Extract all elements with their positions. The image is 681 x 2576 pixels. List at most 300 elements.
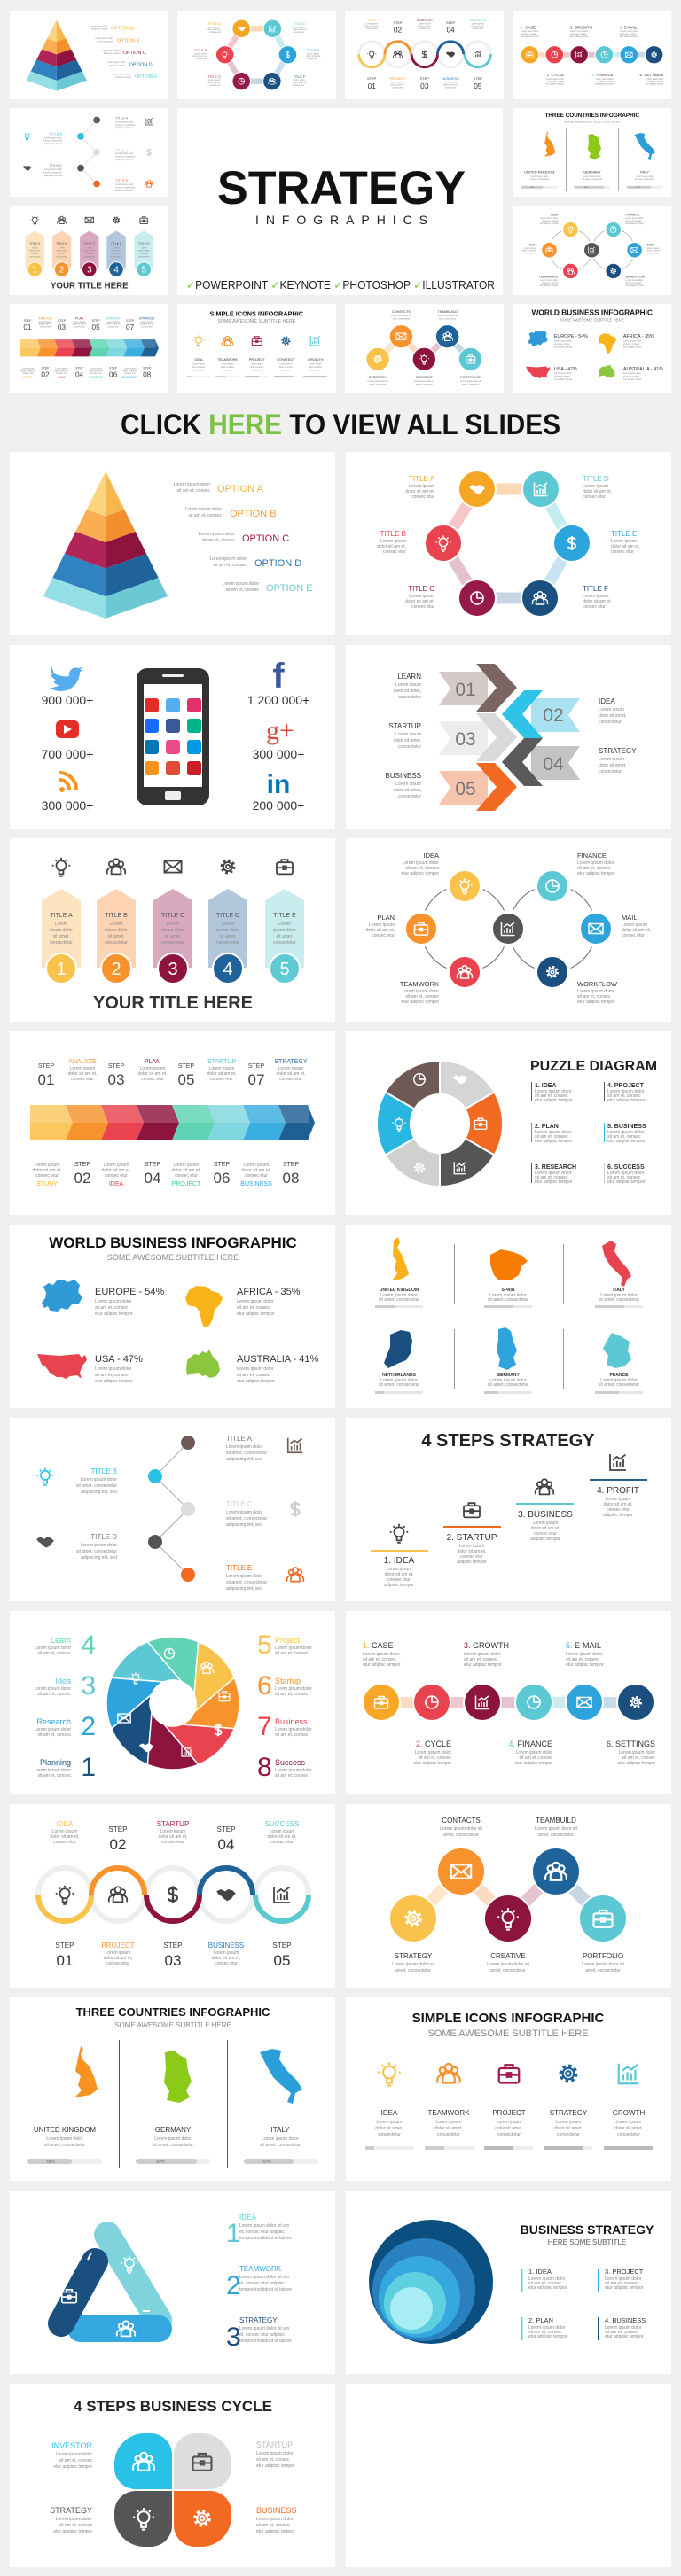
step labels: Lorem ipsum — [387, 1567, 411, 1572]
panel: six countries — [346, 1225, 671, 1408]
column texts: TITLE E — [273, 913, 296, 919]
wave labels: BUSINESS — [208, 1942, 244, 1950]
triangle list: tempor incididunt ut labore — [239, 2287, 292, 2292]
ring labels: dolor sit am et, — [405, 599, 434, 604]
panel: world business infographic — [10, 1225, 335, 1408]
right labels: 6 — [257, 1671, 272, 1700]
bottom step labels: IDEA — [109, 1181, 123, 1187]
panel: hexagon ring — [346, 452, 671, 635]
loop labels: consec etur — [372, 933, 395, 938]
column texts: sit amet, — [165, 934, 181, 939]
stat: google plus: 300 000+ — [253, 747, 304, 761]
panel: wave steps — [10, 1804, 335, 1988]
country labels: Lorem ipsum dolor — [380, 1378, 418, 1383]
right labels: Lorem ipsum dolor — [275, 1646, 312, 1651]
chevron labels: LEARN — [397, 673, 421, 681]
triangle list: et, consec etur adipisic — [239, 2230, 285, 2235]
triangle list: tempor incididunt ut labore — [239, 2339, 292, 2344]
process labels: etur adipisc tempor — [464, 1662, 502, 1668]
wave labels: 03 — [165, 1952, 181, 1969]
step labels: Lorem ipsum — [533, 1521, 558, 1526]
country labels: sit amet, consectetur — [44, 2143, 85, 2148]
loop labels: consec etur — [622, 933, 645, 938]
wave labels: STEP — [109, 1825, 127, 1833]
right labels: 8 — [257, 1753, 272, 1782]
right labels: Lorem ipsum dolor — [275, 1727, 312, 1732]
chevron 01 — [439, 664, 517, 712]
panel: chevron steps — [346, 645, 671, 829]
network labels: TEAMBUILD — [536, 1817, 576, 1825]
process labels: etur adipisc tempor — [413, 1761, 451, 1766]
right labels: 5 — [257, 1630, 272, 1660]
icon labels: PROJECT — [492, 2109, 526, 2117]
top step labels: consec etur — [71, 1077, 94, 1082]
ring labels: consec etur — [411, 494, 434, 500]
tree labels: sit amet, consectetur — [226, 1516, 267, 1521]
left labels: Lorem ipsum dolor — [35, 1646, 71, 1651]
wave labels: Lorem ipsum — [106, 1950, 130, 1956]
process labels: 4. FINANCE — [508, 1739, 552, 1748]
icon labels: dolor sit amet, — [554, 2126, 583, 2131]
icon labels: Lorem ipsum — [556, 2120, 581, 2125]
options list: OPTION A — [217, 484, 264, 494]
ring labels: consec etur — [411, 604, 434, 610]
left labels: Planning — [40, 1758, 71, 1767]
column texts: TITLE D — [216, 913, 239, 919]
wave labels: STEP — [273, 1942, 291, 1950]
column texts: sit amet, — [108, 934, 124, 939]
wave labels: SUCCESS — [265, 1820, 299, 1828]
column texts: Lorem — [167, 922, 179, 927]
strategy items: 3. PROJECT — [605, 2268, 644, 2276]
europe text: EUROPE - 54% — [95, 1287, 164, 1297]
puzzle items: Lorem ipsum dolor — [535, 1130, 572, 1135]
country labels: Lorem ipsum dolor — [380, 1293, 418, 1298]
puzzle items: sit am et, consec — [607, 1175, 641, 1180]
process labels: 3. GROWTH — [464, 1641, 509, 1650]
left labels: 4 — [81, 1630, 96, 1660]
cycle labels: sit am et, consec — [59, 2523, 92, 2528]
top step labels: dolor sit am et, — [277, 1071, 305, 1077]
panel: social media — [10, 645, 335, 829]
loop labels: sit am et, consec — [405, 866, 439, 871]
top step labels: STARTUP — [207, 1059, 236, 1065]
step labels: dolor sit am et, — [531, 1526, 560, 1531]
options list: OPTION E — [266, 583, 313, 594]
process labels: Lorem ipsum dolor — [464, 1652, 501, 1657]
puzzle items: etur adipisc tempor — [535, 1139, 573, 1144]
puzzle items: sit am et, consec — [607, 1134, 641, 1140]
bottom step labels: STEP — [145, 1162, 160, 1168]
australia text: sit am et, consec — [237, 1373, 270, 1378]
options list: OPTION D — [254, 558, 301, 569]
top step labels: consec etur — [141, 1077, 164, 1082]
cycle labels — [50, 2440, 297, 2534]
step lines — [371, 1479, 647, 1552]
bottom step labels: 08 — [283, 1170, 299, 1187]
strategy items — [521, 2268, 646, 2340]
bottom step labels: dolor sit am et, — [172, 1168, 200, 1173]
chevron labels: Lorem ipsum — [395, 682, 421, 688]
panel: your title here columns — [10, 838, 335, 1022]
strategy items: etur adipisic tempor — [528, 2285, 568, 2291]
step labels: dolor sit am et, — [604, 1502, 632, 1507]
tree connectors — [155, 1443, 188, 1575]
triangle list: STRATEGY — [239, 2316, 278, 2324]
map: uk — [392, 1237, 409, 1280]
column texts: TITLE A — [50, 913, 73, 919]
bottom step labels: PROJECT — [172, 1181, 201, 1187]
bottom step labels: BUSINESS — [240, 1181, 272, 1187]
map: germany — [497, 1327, 517, 1370]
options list: OPTION C — [242, 533, 289, 544]
column tabs — [42, 889, 304, 968]
cycle labels: Lorem ipsum dolor — [256, 2451, 294, 2456]
network labels: amet, consectetur — [395, 1968, 431, 1973]
left labels: Lorem ipsum dolor — [35, 1686, 71, 1692]
chevron 05 — [439, 763, 517, 811]
wave labels: dolor sit am et, — [159, 1834, 187, 1840]
left labels: sit am et, consec — [37, 1773, 71, 1778]
country labels: Lorem ipsum dolor — [489, 1293, 527, 1298]
loop labels: Lorem ipsum dolor — [577, 989, 614, 994]
wave labels: Lorem ipsum — [270, 1829, 294, 1834]
top step labels: dolor sit am et, — [138, 1071, 167, 1077]
step labels: 3. BUSINESS — [518, 1510, 573, 1520]
tree labels: adipiscing elit, sed — [226, 1522, 262, 1528]
map: france — [603, 1333, 631, 1368]
progress bars: 82% — [156, 2159, 165, 2164]
cycle labels: etur adipisic tempor — [53, 2464, 92, 2470]
hero: strategy infographics — [177, 108, 503, 295]
ring labels: Lorem ipsum — [611, 539, 637, 544]
top step labels: STEP — [38, 1063, 54, 1070]
tree labels: Lorem ipsum dolor — [226, 1574, 263, 1579]
panel: 4 steps strategy — [346, 1418, 671, 1601]
map: europe — [42, 1280, 82, 1312]
strategy items: sit am et, consec — [528, 2281, 562, 2286]
loop labels: etur adipisc tempor — [577, 1000, 615, 1005]
stat: rss: 300 000+ — [42, 798, 93, 813]
panel: puzzle diagram — [346, 1031, 671, 1215]
strategy items: 2. PLAN — [528, 2316, 553, 2324]
chevron labels: Lorem ipsum — [395, 732, 421, 737]
column texts: consectetur — [273, 940, 296, 946]
cycle labels: INVESTOR — [51, 2441, 93, 2450]
progress bars: 59% — [46, 2159, 55, 2164]
panel: six circles process — [346, 1611, 671, 1794]
progress bars — [27, 2159, 318, 2164]
bottom step labels: STEP — [74, 1162, 90, 1168]
phone with app grid — [137, 668, 209, 805]
tree labels: TITLE A — [226, 1435, 253, 1443]
triangle list: TEAMWORK — [239, 2265, 282, 2273]
wave labels: dolor sit am et, — [268, 1834, 296, 1840]
wave labels: 01 — [57, 1952, 73, 1969]
column texts: ipsum dolor — [273, 928, 296, 933]
heading: WORLD BUSINESS INFOGRAPHIC — [49, 1234, 297, 1251]
process labels: Lorem ipsum dolor — [363, 1652, 400, 1657]
chevron 04 — [502, 738, 580, 786]
africa text: sit am et, consec — [237, 1305, 270, 1311]
tree labels: Lorem ipsum dolor — [226, 1444, 263, 1450]
tree nodes — [148, 1436, 195, 1582]
right labels: Lorem ipsum dolor — [275, 1686, 312, 1692]
chevron 02 — [502, 690, 580, 738]
column texts: consectetur — [105, 940, 128, 946]
left labels: Lorem ipsum dolor — [35, 1768, 71, 1773]
strategy items: sit am et, consec — [528, 2330, 562, 2335]
icon row — [378, 2062, 638, 2086]
top step labels: Lorem ipsum — [140, 1066, 165, 1071]
strategy items: Lorem ipsum dolor — [528, 2276, 566, 2282]
subtitle: SOME AWESOME SUBTITLE HERE — [114, 2021, 231, 2029]
heading: THREE COUNTRIES INFOGRAPHIC — [76, 2005, 270, 2019]
icon: linkedin: in — [267, 770, 290, 799]
top step labels: 07 — [248, 1071, 264, 1088]
wave labels: IDEA — [57, 1820, 74, 1828]
ring nodes — [425, 471, 591, 617]
icon: google plus: g+ — [266, 716, 294, 745]
tree labels — [76, 1435, 267, 1592]
step labels: dolor sit am et, — [385, 1572, 413, 1577]
network labels: Lorem ipsum dolor sit — [487, 1962, 530, 1967]
bottom step labels: STEP — [214, 1162, 230, 1168]
right labels: sit am et, consec — [275, 1651, 309, 1656]
strategy items: Lorem ipsum dolor — [605, 2276, 642, 2282]
left labels: sit am et, consec — [37, 1692, 71, 1697]
map: italy — [260, 2049, 302, 2104]
wave rings — [38, 1868, 309, 1921]
process labels: Lorem ipsum dolor — [516, 1750, 552, 1755]
step labels: consec etur — [534, 1531, 557, 1537]
icon labels: dolor sit amet, — [375, 2126, 403, 2131]
options list — [174, 482, 313, 594]
nested circles — [369, 2220, 493, 2344]
icon: facebook: f — [272, 657, 285, 696]
ring labels: Lorem ipsum — [380, 539, 406, 544]
country labels: sit amet, consectetur — [599, 1382, 639, 1388]
country labels — [34, 2126, 301, 2148]
column texts: consectetur — [216, 940, 239, 946]
process labels: sit am et, consec — [566, 1657, 599, 1662]
right labels: sit am et, consec — [275, 1692, 309, 1697]
left labels: sit am et, consec — [37, 1732, 71, 1738]
network labels: Lorem ipsum dolor sit — [440, 1826, 483, 1832]
stat: facebook: 1 200 000+ — [247, 693, 309, 707]
triangle list: et, consec etur adipisic — [239, 2332, 285, 2338]
triangle list: 2 — [226, 2271, 241, 2300]
usa text: Lorem ipsum dolor — [95, 1366, 132, 1372]
map: italy — [602, 1241, 631, 1287]
step labels: adipisic tempor — [530, 1537, 560, 1542]
column texts: ipsum dolor — [161, 928, 184, 933]
heading: BUSINESS STRATEGY — [521, 2222, 654, 2237]
bottom step labels: 04 — [145, 1170, 160, 1187]
puzzle items: Lorem ipsum dolor — [607, 1171, 645, 1176]
map: australia — [186, 1350, 220, 1378]
loop labels: PLAN — [377, 914, 395, 922]
right labels: sit am et, consec — [275, 1773, 309, 1778]
country labels: ITALY — [613, 1288, 625, 1293]
puzzle items: sit am et, consec — [607, 1093, 641, 1099]
wave labels: dolor sit am et, — [212, 1956, 240, 1961]
network labels: Lorem ipsum dolor sit — [392, 1962, 435, 1967]
panel: timeline tree — [10, 1418, 335, 1601]
process labels: etur adipisc tempor — [566, 1662, 604, 1668]
triangle list: et, consec etur adipisic — [239, 2281, 285, 2286]
panel: contacts network — [346, 1804, 671, 1988]
left labels: sit am et, consec — [37, 1651, 71, 1656]
icon labels: Lorem ipsum — [616, 2120, 641, 2125]
loop labels: Lorem ipsum dolor — [403, 989, 439, 994]
step labels: Lorem ipsum — [606, 1497, 630, 1502]
options list: sit am et, consec — [225, 588, 259, 593]
software list: ✓POWERPOINT ✓KEYNOTE ✓PHOTOSHOP ✓ILLUSTRATOR — [186, 279, 495, 292]
usa text — [95, 1354, 143, 1384]
process labels: etur adipisc tempor — [514, 1761, 552, 1766]
process labels: 1. CASE — [363, 1641, 394, 1650]
europe text: sit am et, consec — [95, 1305, 129, 1311]
top step labels: STRATEGY — [274, 1059, 308, 1065]
cycle labels: Lorem ipsum dolor — [256, 2517, 294, 2522]
column texts: TITLE B — [105, 913, 128, 919]
top step labels: 01 — [38, 1071, 54, 1088]
bottom step labels: STUDY — [36, 1181, 58, 1187]
panel: your title here columns: 3 — [168, 960, 178, 979]
loop labels: Lorem ipsum — [369, 922, 395, 928]
network labels: CONTACTS — [442, 1817, 481, 1825]
tree labels: adipiscing elit, sed — [81, 1555, 117, 1560]
cycle labels: Lorem ipsum dolor — [56, 2517, 92, 2522]
ring labels: Lorem ipsum — [409, 484, 434, 489]
ring labels: consec etur — [383, 549, 406, 555]
icon labels: dolor sit amet, — [495, 2126, 523, 2131]
network labels: Lorem ipsum dolor sit — [582, 1962, 625, 1967]
chevron numbers: 05 — [455, 779, 476, 799]
network labels: amet, consectetur — [538, 1833, 574, 1838]
step labels: 1. IDEA — [384, 1556, 415, 1566]
process labels: etur adipisc tempor — [617, 1761, 655, 1766]
wave icons — [56, 1886, 290, 1904]
ring labels: TITLE F — [583, 585, 608, 593]
wave labels: consec etur — [270, 1840, 294, 1845]
wave labels: consec etur — [161, 1840, 184, 1845]
column texts: Lorem — [110, 922, 122, 927]
step labels — [384, 1486, 639, 1588]
triangle list: Lorem ipsum dolor sit am — [239, 2275, 289, 2280]
bottom step labels: Lorem ipsum — [174, 1163, 199, 1168]
loop labels: sit am et, consec — [577, 994, 611, 1000]
tree labels: adipiscing elit, sed — [81, 1490, 117, 1495]
loop labels: WORKFLOW — [577, 980, 618, 988]
call to action heading: CLICK HERE TO VIEW ALL SLIDES — [121, 409, 560, 440]
icon: youtube — [56, 720, 79, 738]
loop labels: sit am et, consec — [577, 866, 611, 871]
process labels: 6. SETTINGS — [607, 1739, 655, 1748]
wave labels: consec etur — [106, 1961, 129, 1966]
triangle list: tempor incididunt ut labore — [239, 2236, 292, 2241]
ring labels: TITLE A — [409, 475, 435, 483]
cycle labels: BUSINESS — [256, 2506, 297, 2515]
step labels: consec etur — [460, 1554, 483, 1560]
loop labels: MAIL — [622, 914, 638, 922]
wave labels: dolor sit am et, — [51, 1834, 79, 1840]
thumbnails grid — [10, 11, 671, 393]
top step labels: 05 — [178, 1071, 194, 1088]
top step labels: STEP — [108, 1063, 124, 1070]
panel: 8 segment pinwheel — [10, 1611, 335, 1794]
step labels: dolor sit am et, — [458, 1549, 486, 1554]
loop labels: sit am et, consec — [405, 994, 439, 1000]
panel: infinity loop — [346, 838, 671, 1022]
arrow band — [30, 1105, 315, 1140]
column texts: consectetur — [50, 940, 73, 946]
node icons — [436, 482, 575, 604]
australia text: etur adipisc tempor — [237, 1379, 275, 1384]
stat: linkedin: 200 000+ — [253, 798, 304, 813]
chevron labels: dolor sit amet, — [599, 763, 626, 768]
panel: your title here columns: 2 — [111, 960, 121, 979]
map: usa — [37, 1354, 87, 1379]
step labels: consec etur — [607, 1507, 630, 1513]
usa text: etur adipisc tempor — [95, 1379, 133, 1384]
ring labels: consec etur — [583, 604, 606, 610]
country labels: SPAIN — [502, 1288, 515, 1293]
ring labels: Lorem ipsum — [583, 594, 608, 599]
bottom step labels: consec etur — [35, 1173, 59, 1179]
icon labels: Lorem ipsum — [436, 2120, 461, 2125]
subtitle: SOME AWESOME SUBTITLE HERE — [107, 1253, 239, 1262]
process labels: sit am et, consec — [622, 1755, 655, 1761]
country labels: sit amet, consectetur — [488, 1382, 528, 1388]
australia text — [237, 1354, 319, 1384]
step icons — [390, 1454, 626, 1543]
bottom step labels: Lorem ipsum — [104, 1163, 129, 1168]
bottom step labels: Lorem ipsum — [244, 1163, 269, 1168]
right labels: Success — [275, 1758, 306, 1767]
puzzle items: 4. PROJECT — [607, 1083, 645, 1089]
triangle list: 1 — [226, 2219, 241, 2248]
bottom step labels — [33, 1162, 299, 1187]
network labels: CREATIVE — [490, 1952, 526, 1960]
chevron labels: dolor sit amet, — [394, 738, 421, 743]
country labels: Lorem ipsum dolor — [489, 1378, 527, 1383]
puzzle items: sit am et, consec — [535, 1093, 568, 1099]
ring labels: consec etur — [583, 494, 606, 500]
ring labels: Lorem ipsum — [409, 594, 434, 599]
triangle list — [226, 2214, 292, 2352]
progress bars — [375, 1305, 643, 1394]
puzzle items: etur adipisc tempor — [535, 1098, 573, 1103]
column texts: Lorem — [222, 922, 234, 927]
step labels: 2. STARTUP — [447, 1533, 497, 1543]
column texts: sit amet, — [220, 934, 236, 939]
wave labels: Lorem ipsum — [214, 1950, 239, 1956]
map: united kingdom — [74, 2046, 98, 2097]
tree labels: sit amet, consectetur — [226, 1451, 267, 1456]
strategy items: etur adipisic tempor — [605, 2334, 644, 2339]
strategy items: 4. BUSINESS — [605, 2316, 646, 2324]
options list: Lorem ipsum dolor — [210, 556, 247, 562]
top step labels: Lorem ipsum — [209, 1066, 234, 1071]
left labels: 3 — [81, 1671, 96, 1700]
wave labels: consec etur — [215, 1961, 238, 1966]
bottom step labels: consec etur — [175, 1173, 198, 1179]
process labels: Lorem ipsum dolor — [619, 1750, 655, 1755]
country labels: UNITED KINGDOM — [34, 2126, 96, 2134]
tree labels: Lorem ipsum dolor — [226, 1510, 263, 1515]
